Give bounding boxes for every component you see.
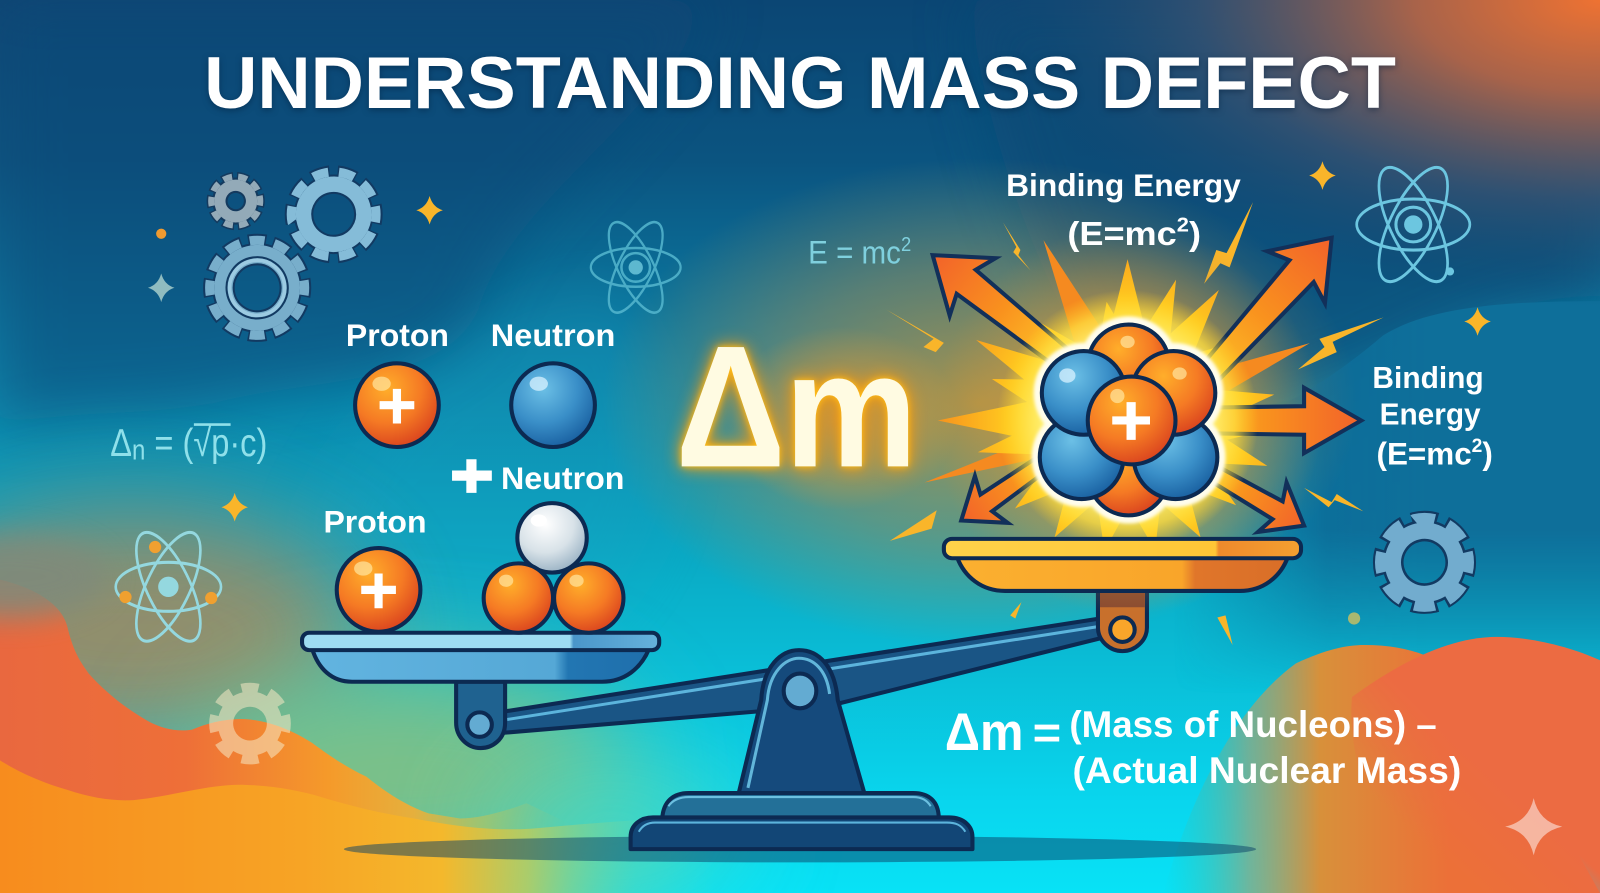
arrow: upper left (910, 226, 1095, 395)
nucleon spheres (1040, 325, 1217, 515)
left pan (302, 633, 659, 682)
label: binding energy top: 2 (1177, 215, 1189, 237)
formula: delta n: n (132, 434, 145, 466)
formula: E = mc2: E = mc (808, 233, 911, 270)
delta m symbol: m (785, 318, 917, 501)
balance scale (302, 589, 1147, 849)
label: binding energy right: Binding (1372, 361, 1484, 395)
label: binding energy top (1006, 167, 1241, 253)
icon: atom left (116, 522, 221, 652)
plus sign (452, 459, 492, 493)
energy burst spikes (921, 227, 1321, 614)
formula: E = mc2: 2 (901, 234, 911, 256)
arrow: lower left (945, 421, 1086, 544)
neutron label lower: Neutron (501, 460, 624, 496)
formula: delta n (110, 422, 267, 466)
right support (1098, 589, 1147, 651)
left support (456, 682, 505, 748)
label: binding energy right: ) (1482, 435, 1493, 471)
formula: mass defect definition: = (1033, 707, 1061, 758)
delta m symbol: Δ (676, 309, 786, 503)
icon: atom top right (1357, 156, 1470, 293)
label: binding energy right (1372, 361, 1493, 471)
delta m symbol (676, 309, 917, 503)
icon: medium gear (284, 165, 383, 264)
scale base (631, 793, 972, 849)
label: binding energy right: (E=mc (1377, 435, 1472, 471)
icon: small gear (207, 172, 264, 230)
label: binding energy top: ) (1189, 216, 1201, 253)
proton label top: Proton (346, 317, 449, 353)
formula: mass defect definition (945, 703, 1461, 791)
label: binding energy right: 2 (1472, 435, 1482, 457)
pillar (739, 650, 864, 793)
label: binding energy top: Binding Energy (1006, 167, 1241, 203)
formula: delta n: = (√p·c) (145, 422, 267, 465)
label: binding energy right: Energy (1380, 398, 1481, 432)
formula: mass defect definition: Δm (945, 703, 1023, 762)
nucleus cluster (1032, 316, 1226, 524)
scale beam (504, 618, 1102, 733)
arrow: upper right (1163, 212, 1360, 419)
proton ball top (355, 363, 439, 447)
proton ball on left pan (337, 548, 420, 632)
ground shadow (344, 836, 1256, 862)
neutron label top: Neutron (491, 317, 615, 353)
formula: delta n: Δ (110, 422, 136, 465)
right pan (944, 539, 1301, 591)
central glow (997, 290, 1258, 551)
title: UNDERSTANDING MASS DEFECT (204, 41, 1396, 124)
arrow: lower right (1170, 432, 1318, 550)
lightning bolts (886, 202, 1384, 645)
neutron ball top (511, 363, 595, 447)
icon: atom centre (591, 214, 681, 321)
nucleon stack on left pan (484, 503, 623, 633)
nucleus white halo (1032, 316, 1226, 524)
decorative stars and dots (148, 161, 1562, 855)
proton label lower: Proton (323, 504, 427, 540)
icon: right gear (1372, 510, 1477, 615)
formula: mass defect definition: (Actual Nuclear Mass) (1072, 750, 1461, 791)
icon: large gear (203, 234, 311, 342)
arrow: right (1167, 388, 1361, 453)
icon: faded gear (208, 682, 292, 765)
formula: mass defect definition: (Mass of Nucleons) – (1069, 704, 1437, 745)
label: binding energy top: (E=mc (1067, 216, 1169, 253)
